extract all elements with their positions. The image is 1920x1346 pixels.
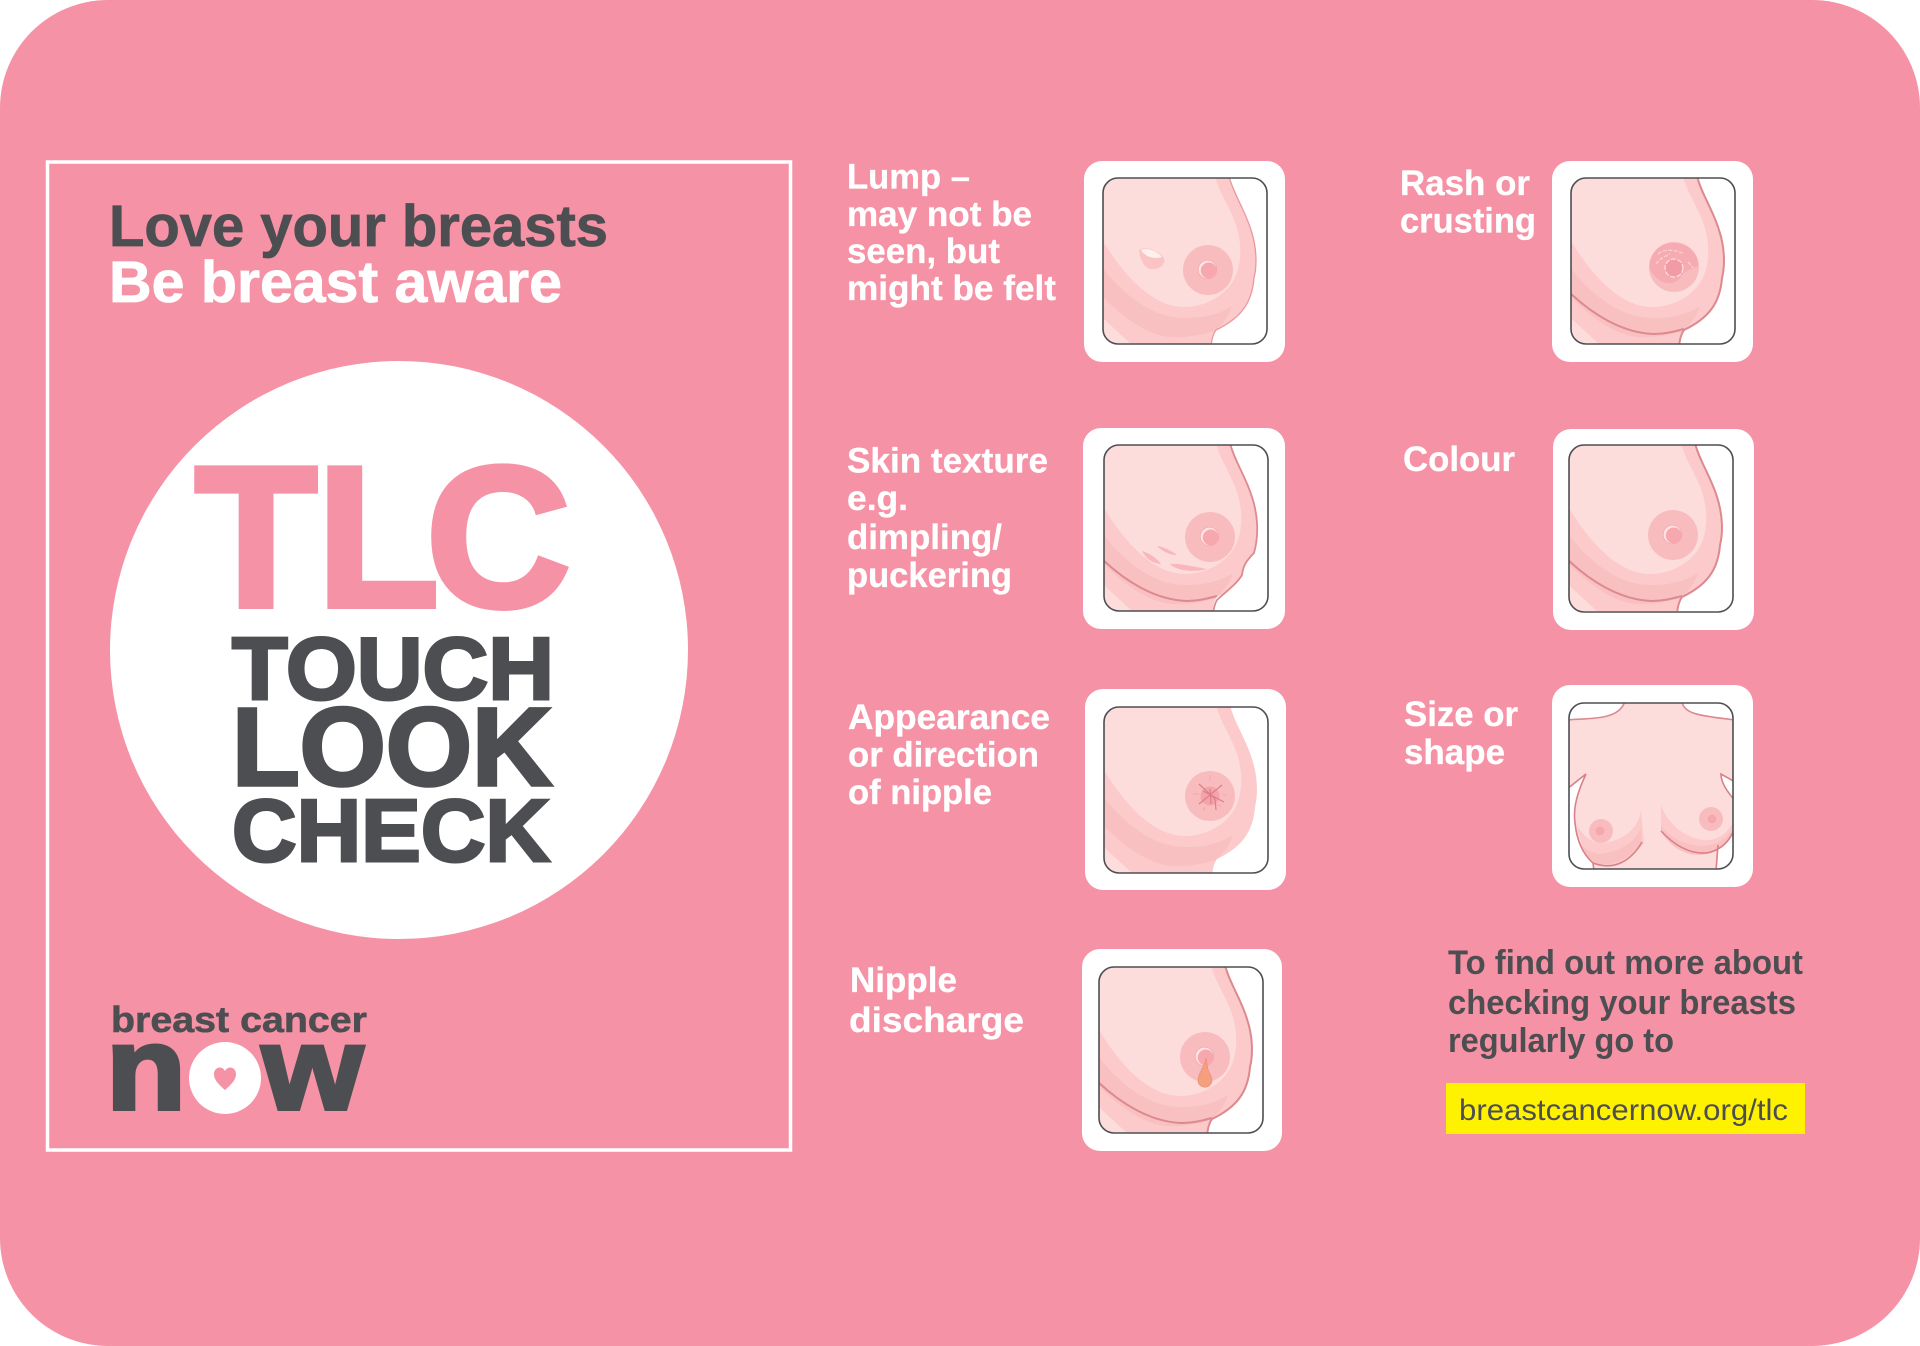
card [1553,429,1754,630]
icon: torso front view [1567,701,1735,871]
touch look check [232,619,554,880]
item: appearance of nipple [848,689,1286,890]
icon: heart [214,1067,236,1090]
label: Rash or [1400,164,1530,203]
icon: breast with colour change [1567,443,1733,613]
heading: Love your breasts [109,194,608,259]
logo: breast cancer now [106,999,367,1135]
item: nipple discharge [849,949,1282,1151]
TLC letters: TLC [195,426,570,649]
panel: TLC campaign [48,162,790,1150]
icon: breast with lump [1101,176,1267,346]
label: puckering [847,556,1012,595]
icon: breast with inverted nipple [1102,705,1268,875]
label: Nipple [850,961,957,1000]
label: seen, but [847,232,1000,271]
logo: breast cancer now: n [106,1003,186,1135]
label: shape [1404,733,1505,772]
icon: breast with discharge [1097,965,1263,1135]
url highlight box [1446,1083,1805,1134]
label: Colour [1403,440,1515,479]
card [1552,161,1753,362]
logo: breast cancer now: w [261,1003,364,1135]
label: Skin texture [847,442,1048,480]
label [1404,695,1518,772]
heading [109,194,608,315]
item: rash or crusting [1400,161,1753,362]
card [1085,689,1286,890]
label: crusting [1400,202,1536,240]
touch look check: CHECK [232,781,550,880]
label: of nipple [848,773,992,812]
touch look check: TOUCH [232,619,554,718]
item: size or shape [1404,685,1753,887]
label: e.g. [847,479,908,518]
item: skin texture [847,428,1285,629]
label [849,961,1024,1040]
card [1552,685,1753,887]
icon: breast with rash [1569,176,1735,346]
item: lump [847,158,1285,362]
text: find out more: checking your breasts [1448,984,1796,1022]
call to action [1446,944,1805,1134]
label: Size or [1404,695,1518,734]
label: dimpling/ [847,518,1002,557]
label: Lump – [847,158,970,196]
label: may not be [847,195,1032,234]
label: Appearance [848,698,1050,737]
item: colour [1403,429,1754,630]
card [1082,949,1282,1151]
white circle with TLC wordmark [110,361,688,939]
label [847,442,1048,595]
text: find out more: regularly go to [1448,1022,1674,1060]
text: find out more [1448,944,1803,1060]
label: might be felt [847,269,1056,308]
text: find out more: To find out more about [1448,944,1803,982]
panel frame [48,162,790,1150]
heading: Be breast aware [109,250,562,315]
label [847,158,1056,308]
label [848,698,1050,812]
logo: breast cancer now: breast cancer [111,999,367,1040]
label: discharge [849,1001,1024,1040]
card [1083,428,1285,629]
icon: breast with dimpling [1102,443,1274,613]
card [1084,161,1285,362]
label [1400,164,1536,240]
touch look check: LOOK [232,686,552,809]
url: breastcancernow.org/tlc [1459,1094,1788,1127]
label: or direction [848,736,1039,774]
